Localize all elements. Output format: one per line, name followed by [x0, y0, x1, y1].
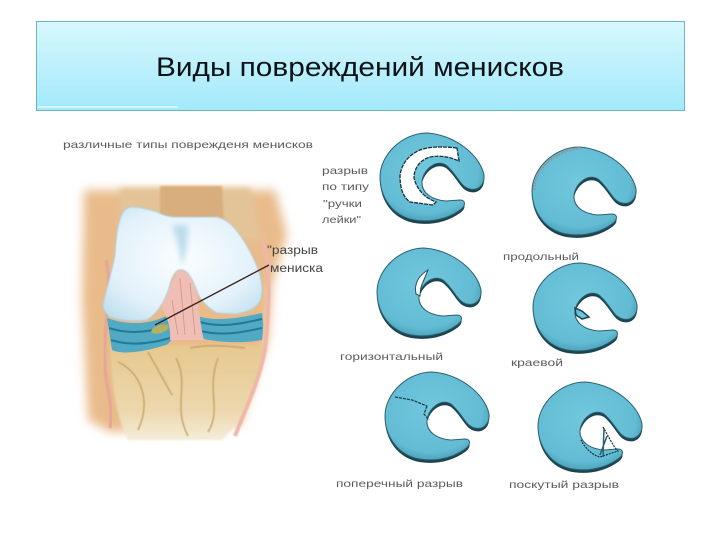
knee callout — [267, 245, 324, 275]
cruciate ligament — [160, 269, 204, 340]
type: flap: поскутый разрыв — [509, 479, 620, 491]
femur centre shading — [172, 225, 188, 266]
femur — [103, 207, 262, 321]
knee illustration — [82, 186, 287, 440]
pointer line — [155, 265, 269, 325]
type: bucket handle: "ручки — [323, 198, 362, 210]
title: Виды повреждений менисков — [156, 52, 564, 82]
knee callout: "разрыв — [267, 245, 318, 257]
type: horizontal: горизонтальный — [340, 351, 443, 363]
title banner — [36, 22, 684, 110]
knee callout: мениска — [270, 263, 324, 275]
type: transverse — [336, 372, 489, 490]
skin background — [82, 190, 287, 432]
type: bucket handle: лейки" — [322, 214, 361, 226]
type: horizontal — [340, 248, 481, 363]
type: bucket handle — [322, 133, 484, 226]
meniscus band right — [198, 313, 263, 342]
meniscus band left — [107, 316, 174, 353]
type: longitudinal — [503, 147, 636, 263]
type: longitudinal: продольный — [503, 251, 579, 263]
type: flap — [509, 382, 642, 491]
type: transverse: поперечный разрыв — [336, 478, 464, 490]
type: marginal — [511, 263, 637, 369]
torn meniscus spot — [150, 322, 170, 336]
knee heading: различные типы повреждeня менисков — [63, 139, 314, 151]
type: bucket handle: разрыв — [322, 165, 369, 177]
tibia — [110, 345, 264, 440]
type: marginal: краевой — [511, 357, 563, 369]
type: bucket handle: по типу — [322, 181, 370, 193]
side ligaments — [104, 260, 111, 428]
